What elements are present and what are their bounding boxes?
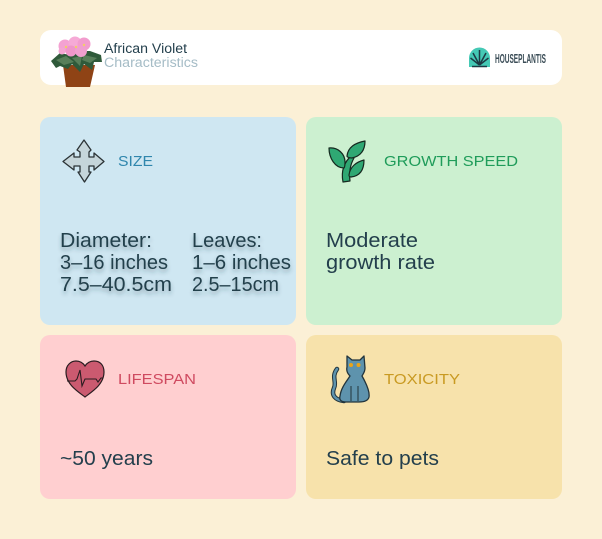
label: lifespan: LIFESPAN: [118, 371, 196, 388]
growth value: Moderate: [326, 229, 418, 252]
size values: 7.5–40.5cm: [60, 273, 172, 296]
growth value: growth rate: [326, 251, 435, 274]
size values: 1–6 inches: [192, 251, 291, 274]
size values: 2.5–15cm: [192, 273, 279, 296]
panel: size: [40, 117, 296, 325]
icon: cat: [333, 356, 369, 402]
subheading: Characteristics: Characteristics: [104, 55, 198, 70]
size values: [60, 229, 291, 296]
label: size: SIZE: [118, 153, 153, 170]
label: growth speed: GROWTH SPEED: [384, 153, 518, 170]
icon: leaves: [329, 141, 365, 182]
toxicity value: Safe to pets: [326, 447, 439, 470]
icon: four-way arrows: [63, 140, 104, 182]
panel: growth speed: [306, 117, 562, 325]
lifespan value: ~50 years: [60, 447, 153, 470]
size values: 3–16 inches: [60, 251, 168, 274]
icon: heartbeat heart: [66, 361, 104, 397]
size values: Diameter:: [60, 229, 152, 252]
panel: toxicity: [306, 335, 562, 499]
size values: Leaves:: [192, 229, 262, 252]
header bar: [40, 30, 562, 87]
panel: lifespan: [40, 335, 296, 499]
heading: African Violet: African Violet: [104, 41, 187, 56]
logo: Houseplantis: [469, 48, 546, 67]
growth value: [326, 229, 435, 274]
label: toxicity: TOXICITY: [384, 371, 460, 388]
icon: african violet plant: [51, 36, 102, 87]
logo: Houseplantis: HOUSEPLANTIS: [495, 52, 546, 66]
